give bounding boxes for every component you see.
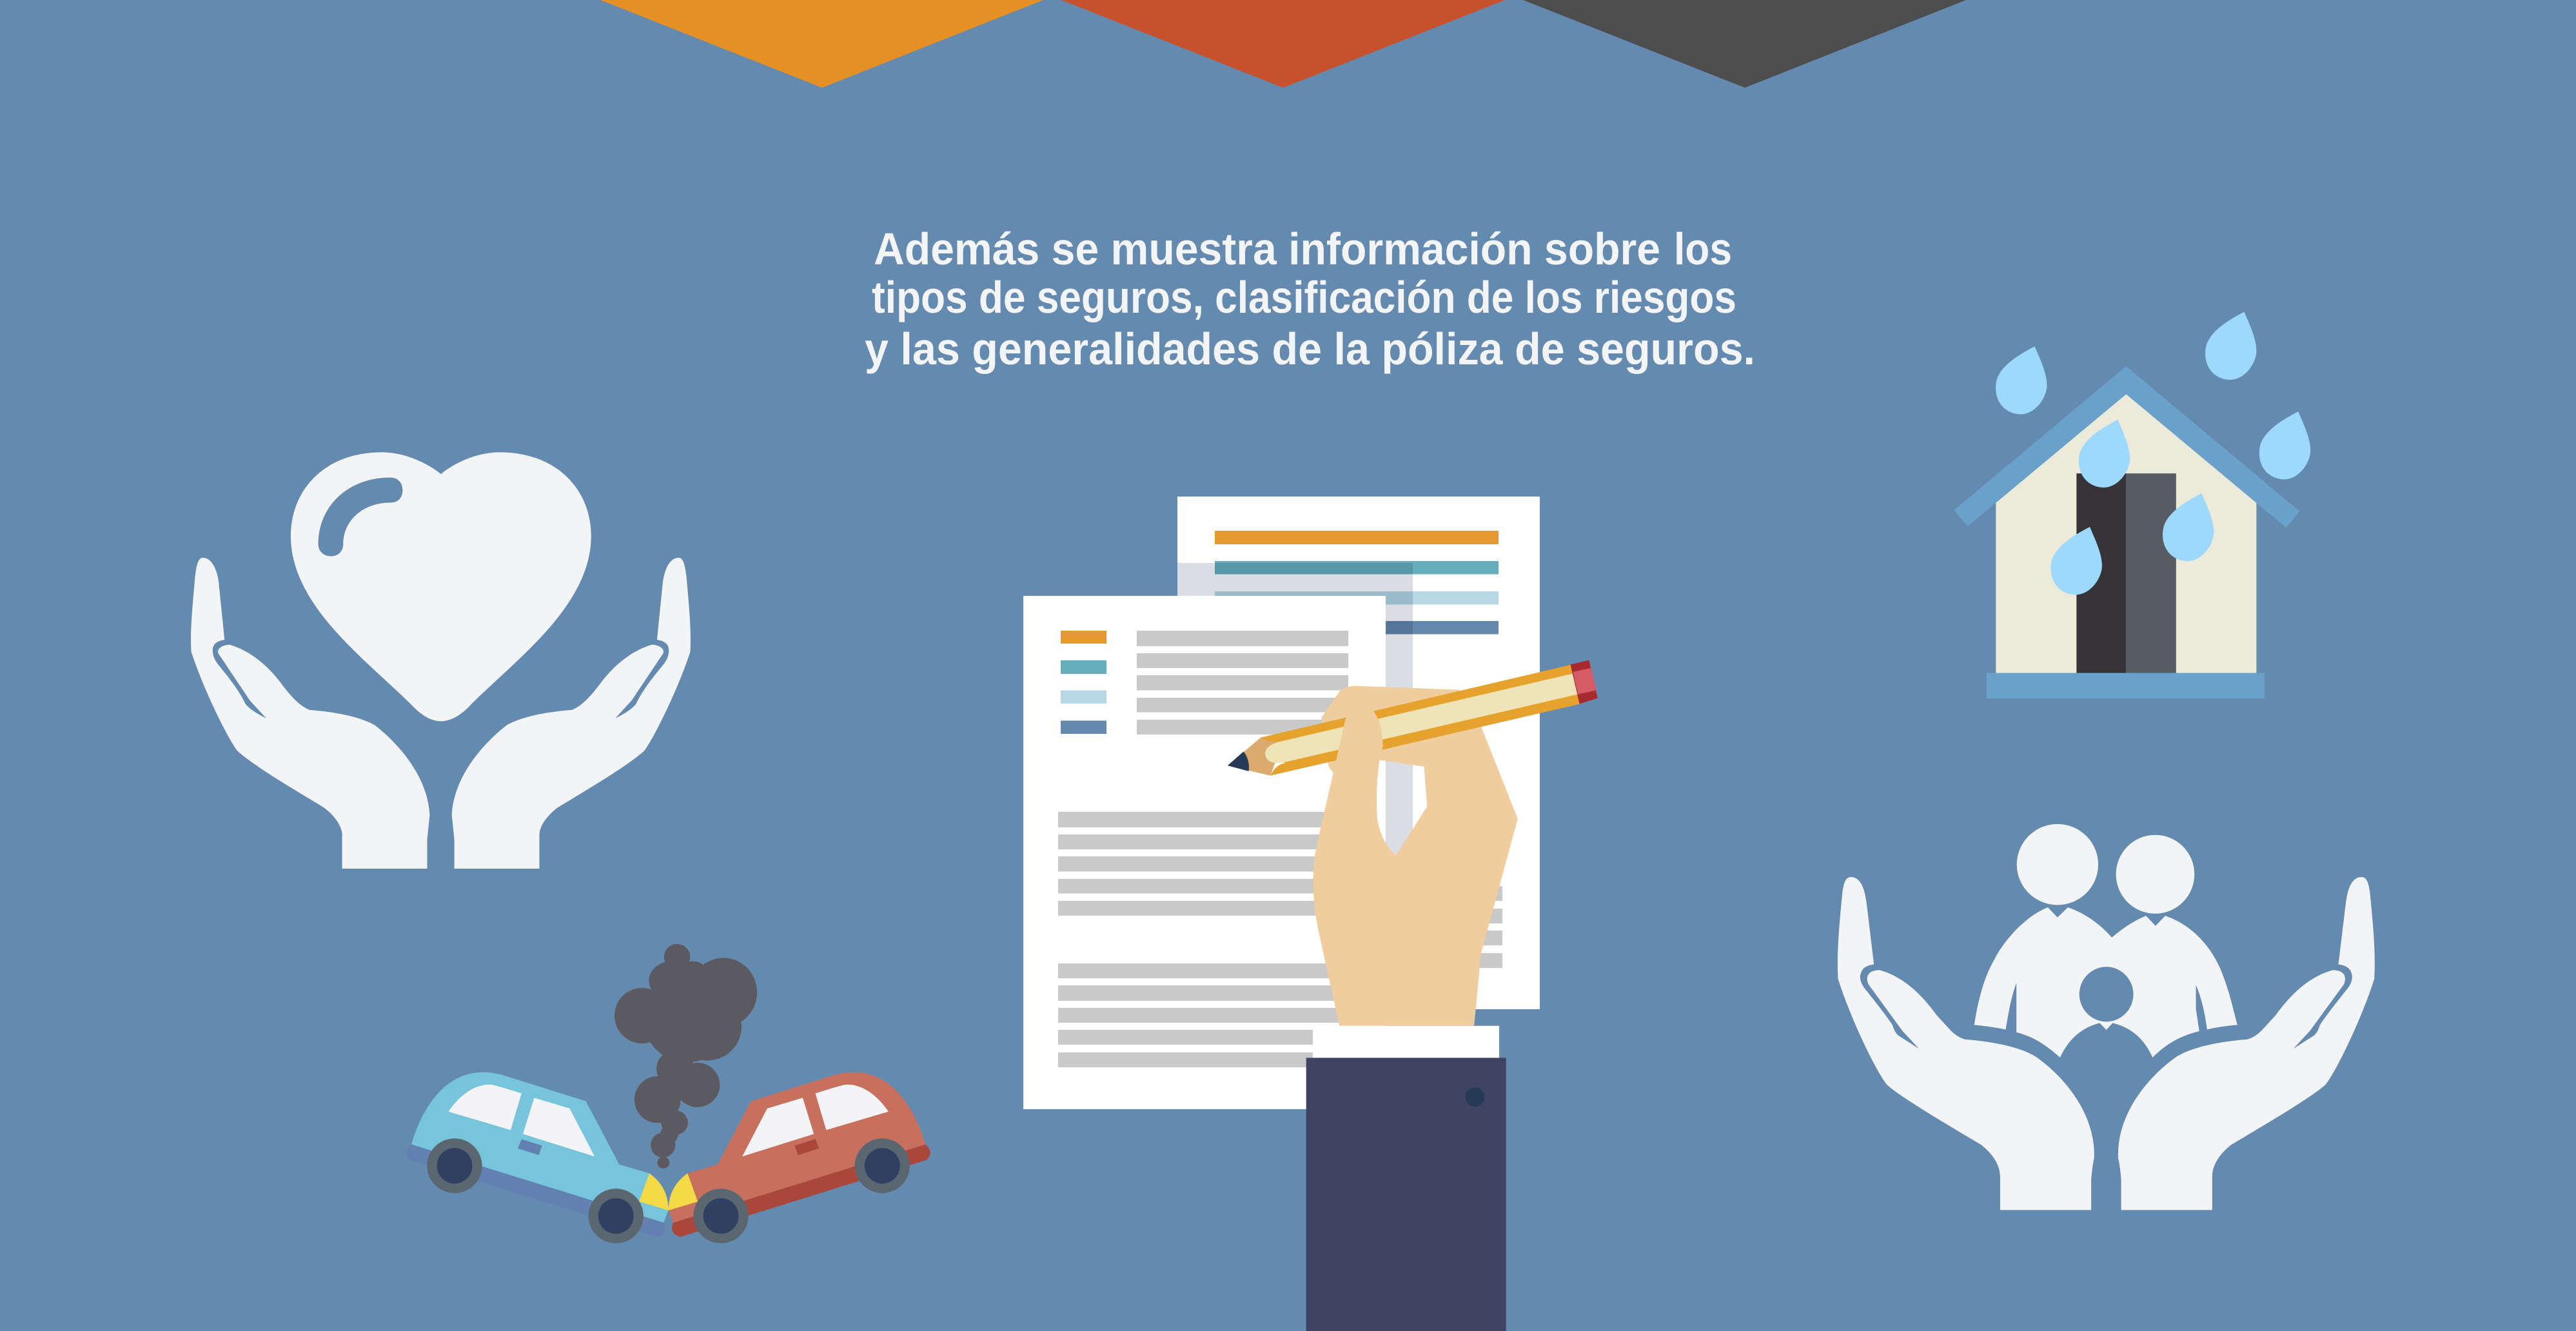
right hand xyxy=(2118,877,2375,1210)
skirt xyxy=(672,1145,930,1237)
line 1: Además se muestra información sobre xyxy=(874,224,1660,274)
front wheel xyxy=(693,1188,749,1243)
door dark half xyxy=(2076,473,2126,673)
door grey half xyxy=(2126,473,2176,673)
sleeve xyxy=(1306,1058,1506,1331)
icon: house in rain xyxy=(1954,312,2310,698)
raindrops xyxy=(1996,312,2310,595)
mother head xyxy=(2116,835,2194,914)
bodies with child cut-out xyxy=(1974,907,2237,1058)
top chevrons xyxy=(600,0,1966,88)
bumper light xyxy=(639,1173,669,1210)
pencil inner xyxy=(1265,673,1578,763)
line 3: y las generalidades de la póliza de seguros. xyxy=(865,324,1755,374)
text lines xyxy=(1419,886,1502,968)
smoke xyxy=(615,944,757,1168)
shirt cuff xyxy=(1313,1026,1499,1058)
back page xyxy=(1177,497,1540,1009)
swatch blue xyxy=(1061,721,1106,734)
documents and writing hand xyxy=(1023,497,1598,1331)
line 1 end: los xyxy=(1674,224,1732,274)
line 2: tipos de seguros, clasificación de los riesgos xyxy=(872,272,1736,322)
front wheel xyxy=(589,1188,644,1243)
window rear xyxy=(815,1085,889,1130)
icon: hands protecting family xyxy=(1838,824,2375,1210)
window front xyxy=(523,1098,595,1156)
front hub xyxy=(598,1198,634,1234)
door handle xyxy=(518,1139,542,1155)
pencil tip wood xyxy=(1228,738,1283,776)
pencil body xyxy=(1261,665,1580,776)
teal bar xyxy=(1215,561,1499,574)
orange bar xyxy=(1215,531,1499,544)
front page xyxy=(1023,596,1386,1109)
right hand xyxy=(452,558,691,869)
eraser xyxy=(1573,668,1597,695)
rear wheel xyxy=(855,1138,910,1193)
left hand xyxy=(191,558,429,869)
sleeve button xyxy=(1465,1087,1485,1107)
orange chevron xyxy=(600,0,1043,88)
heart xyxy=(291,452,591,721)
icon: hands holding heart xyxy=(191,452,691,869)
window front xyxy=(742,1098,814,1156)
rear hub xyxy=(865,1148,900,1183)
pencil xyxy=(1228,660,1598,776)
body xyxy=(411,1072,669,1223)
top text lines xyxy=(1137,631,1348,735)
page shadow xyxy=(1177,563,1413,1014)
eraser band xyxy=(1570,660,1598,704)
back document xyxy=(1177,497,1540,1014)
base xyxy=(1987,673,2265,698)
father head xyxy=(2017,824,2098,905)
red car xyxy=(669,1072,930,1243)
left hand xyxy=(1838,877,2094,1210)
light blue bar xyxy=(1215,591,1499,605)
swatch light blue xyxy=(1061,690,1106,704)
pencil lead xyxy=(1228,751,1249,771)
red chevron xyxy=(1061,0,1505,88)
house walls xyxy=(1996,394,2256,673)
blue bar xyxy=(1215,621,1499,635)
front hub xyxy=(703,1198,739,1234)
front document xyxy=(1023,596,1386,1109)
icon: car crash xyxy=(406,944,930,1243)
dark chevron xyxy=(1523,0,1966,88)
bumper light xyxy=(669,1173,698,1210)
window rear xyxy=(448,1085,522,1130)
hand and pencil xyxy=(1228,660,1598,1331)
hand back xyxy=(1313,686,1518,1026)
roof xyxy=(1954,366,2299,527)
text block: intro xyxy=(865,224,1755,374)
rear hub xyxy=(437,1148,472,1183)
lower text lines xyxy=(1058,963,1348,1067)
body xyxy=(669,1072,925,1223)
rear wheel xyxy=(427,1138,482,1193)
skirt xyxy=(406,1145,665,1237)
swatch teal xyxy=(1061,660,1106,674)
door handle xyxy=(794,1139,819,1155)
legend swatches xyxy=(1061,631,1106,734)
middle text lines xyxy=(1058,812,1348,916)
blue car xyxy=(406,1072,669,1243)
index finger xyxy=(1326,707,1383,844)
swatch orange xyxy=(1061,631,1106,644)
